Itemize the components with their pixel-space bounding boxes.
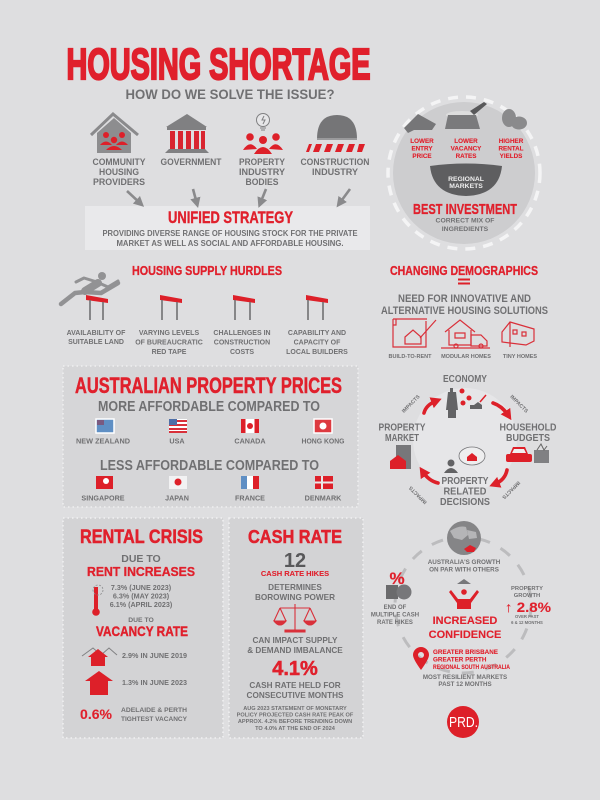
hurdle labels: AVAILABILITY OF [67,330,126,337]
heading: vacancy rate: VACANCY RATE [96,623,188,639]
icon: property market [390,445,411,469]
increased confidence: INCREASED [433,615,497,627]
icon: percent and coins: % [389,569,405,588]
stakeholder labels: INDUSTRY [312,167,359,178]
growth period [511,614,543,625]
heading: best investment: BEST INVESTMENT [413,201,517,218]
property market label: PROPERTY [378,422,426,434]
held text [247,681,344,700]
ingredient labels: LOWER [410,138,434,145]
rent figures [110,583,173,609]
best investment note: INGREDIENTS [442,226,489,233]
icon: globe [447,521,481,555]
property decisions label: DECISIONS [440,496,490,508]
icon: small house [82,648,117,666]
panel: housing supply hurdles [61,264,348,356]
growth period: OVER PAST [515,614,539,619]
icon: mixing bowl [430,164,502,196]
icon: person and thought cloud [444,447,485,473]
equals sign [458,280,470,284]
tightest text: ADELAIDE & PERTH [121,707,187,714]
icon: large house [85,671,113,695]
2019 rate: 2.9% IN JUNE 2019 [122,653,187,660]
icon: economy figures [446,388,486,418]
arrows into strategy [127,189,350,204]
icon: scales [274,604,316,632]
rent figures: 6.1% (APRIL 2023) [110,600,173,609]
panel: economic cycle [378,373,557,508]
heading: rental crisis: RENTAL CRISIS [80,527,203,548]
cash rate hikes end: END OF [384,605,407,611]
panel: australian property prices [63,366,358,507]
logo: PRD: PRD. [449,714,478,731]
hurdle labels: VARYING LEVELS [139,330,199,337]
held text: CONSECUTIVE MONTHS [247,691,344,700]
growth period: 6 & 12 MONTHS [511,620,543,625]
held text: CASH RATE HELD FOR [249,681,341,690]
ingredient labels [410,138,524,160]
economy label: ECONOMY [443,373,487,385]
tightest figure: 0.6% [80,706,113,722]
more affordable heading: MORE AFFORDABLE COMPARED TO [98,399,320,415]
ingredient labels: RENTAL [498,146,524,152]
first row country labels: USA [169,436,185,446]
icon: government [165,114,209,153]
stakeholder labels: GOVERNMENT [160,157,222,168]
housing type labels: TINY HOMES [503,354,537,360]
icon: confident person [449,579,479,609]
hurdle 4 [306,295,328,320]
resilient markets [433,649,510,671]
stakeholder labels: CONSTRUCTION [300,157,370,168]
flag: japan [169,476,187,489]
rba note: POLICY PROJECTED CASH RATE PEAK OF [237,712,354,718]
hurdle labels: OF BUREAUCRATIC [135,340,203,346]
cash rate hikes: CASH RATE HIKES [261,569,329,578]
rent figures: 7.3% (JUNE 2023) [111,583,172,592]
property decisions label [440,475,490,508]
resilient markets: GREATER BRISBANE [433,649,498,656]
impacts labels: IMPACTS [408,484,429,505]
stakeholder labels: HOUSING [99,167,139,178]
heading: cash rate: CASH RATE [248,527,342,547]
first row country labels [76,436,345,446]
2023 rate: 1.3% IN JUNE 2023 [122,680,187,687]
property growth label: PROPERTY [511,586,543,592]
panel: unified strategy [85,206,370,250]
icon: build to rent [393,319,436,347]
heading: australian property prices: AUSTRALIAN PROPERTY PRICES [75,373,342,398]
due to: DUE TO [121,553,161,565]
ingredient labels: LOWER [454,138,478,145]
impacts labels: IMPACTS [500,479,521,500]
determines text: BOROWING POWER [255,593,335,602]
icon: shopping bag [534,444,549,463]
ingredient labels: RATES [456,153,476,160]
icon: location pin [413,647,429,670]
figure 12: 12 [284,550,306,572]
icon: flour [445,102,487,129]
icon: construction helmet [306,115,365,152]
heading: unified strategy: UNIFIED STRATEGY [168,208,293,227]
icon: thermometer [92,585,103,616]
demographics text [381,293,548,317]
subtitle: HOW DO WE SOLVE THE ISSUE? [126,86,334,102]
icon: community housing [91,114,138,153]
first row country labels: CANADA [234,436,266,446]
logo: PRD [447,706,479,738]
panel: rental crisis [63,518,223,738]
panel: increased confidence [371,521,552,688]
best investment note [436,218,494,233]
flag: new zealand [96,419,114,433]
hurdle labels: SUITABLE LAND [68,339,124,346]
title: HOUSING SHORTAGE [66,40,370,89]
second row country labels: SINGAPORE [81,494,125,502]
icon: eggs [502,109,527,130]
impact text: CAN IMPACT SUPPLY [252,636,338,645]
tightest text: TIGHTEST VACANCY [121,716,188,723]
hurdle labels: LOCAL BUILDERS [286,349,348,356]
impact text: & DEMAND IMBALANCE [247,646,343,655]
increased confidence: CONFIDENCE [429,629,501,641]
icon: modular home [441,320,490,348]
stakeholder labels [92,157,370,188]
hurdle 2 [160,295,182,320]
figure 4.1%: 4.1% [272,658,318,680]
unified strategy text: PROVIDING DIVERSE RANGE OF HOUSING STOCK FOR THE PRIVATE [102,229,358,238]
housing type labels: BUILD-TO-RENT [389,354,432,360]
flag: france [241,476,259,489]
property growth label: GROWTH [514,593,540,599]
property decisions label: PROPERTY [442,475,488,487]
impacts labels: IMPACTS [401,394,422,415]
growth text: AUSTRALIA'S GROWTH [428,559,501,566]
panel: best investment [388,97,540,249]
household budgets label: BUDGETS [506,432,550,444]
rba note: AUG 2023 STATEMENT OF MONETARY [243,706,347,712]
housing type labels [389,354,537,360]
housing type labels: MODULAR HOMES [441,354,491,360]
second row country labels: DENMARK [305,494,342,502]
demographics text: ALTERNATIVE HOUSING SOLUTIONS [381,305,548,317]
panel: cash rate [229,518,363,738]
stakeholder labels: COMMUNITY [92,157,146,168]
impact text [247,636,343,655]
growth figure: ↑ 2.8% [505,599,552,615]
unified strategy text: MARKET AS WELL AS SOCIAL AND AFFORDABLE HOUSING. [116,239,344,248]
hurdle labels: CAPABILITY AND [288,330,346,337]
property market label: MARKET [385,432,419,444]
icon: hurdler [61,272,118,304]
hurdle labels: CHALLENGES IN [213,330,271,337]
icon: tiny home [502,322,534,347]
ingredient labels: PRICE [412,153,432,160]
heading: rent increases: RENT INCREASES [87,564,195,579]
hurdle labels [67,330,348,356]
second row country labels: JAPAN [165,494,189,502]
rent figures: 6.3% (MAY 2023) [113,592,170,600]
property growth label [511,586,543,599]
icon: butter [404,114,436,133]
stakeholder labels: PROPERTY [239,157,286,168]
rba note: APPROX. 4.2% BEFORE TRENDING DOWN [238,719,352,725]
best investment note: CORRECT MIX OF [436,218,494,224]
due to small: DUE TO [128,617,154,624]
property decisions label: RELATED [444,486,487,498]
icon: property industry bodies [243,114,283,154]
bowl label: REGIONAL [448,176,484,183]
hurdle labels: CONSTRUCTION [214,340,270,346]
demographics text: NEED FOR INNOVATIVE AND [398,293,531,305]
cycle arrows [423,401,508,484]
icon: car [506,447,532,462]
resilient caption: PAST 12 MONTHS [438,681,492,688]
cash rate hikes end: MULTIPLE CASH [371,612,419,618]
determines text: DETERMINES [268,583,322,592]
first row country labels: NEW ZEALAND [76,436,130,446]
rba note [237,706,354,732]
hurdle labels: CAPACITY OF [294,340,341,346]
growth text: ON PAR WITH OTHERS [429,566,499,574]
property market label [378,422,426,444]
icon: percent and coins [386,569,412,600]
flag: singapore [96,476,113,489]
second row country labels [81,494,342,502]
second row country labels: FRANCE [235,494,265,502]
hurdle 3 [233,295,255,320]
resilient caption: MOST RESILIENT MARKETS [423,674,507,681]
determines text [255,583,335,602]
rba note: TO 4.0% AT THE END OF 2024 [255,726,336,732]
growth text [428,559,501,574]
cash rate hikes end: RATE HIKES [377,620,413,626]
tightest text [121,707,188,723]
hurdle labels: RED TAPE [152,349,187,356]
resilient markets: GREATER PERTH [433,656,487,664]
resilient markets: REGIONAL SOUTH AUSTRALIA [433,664,510,671]
stakeholder labels: BODIES [246,177,278,188]
first row country labels: HONG KONG [302,436,345,446]
less affordable heading: LESS AFFORDABLE COMPARED TO [100,458,319,474]
unified strategy text [102,229,358,248]
increased confidence [429,615,501,641]
ingredient labels: ENTRY [411,146,433,152]
heading: changing demographics: CHANGING DEMOGRAPHICS [390,263,538,278]
flag: hong kong [314,419,332,433]
household budgets label: HOUSEHOLD [500,422,557,434]
bowl label: MARKETS [449,183,483,190]
resilient caption [423,674,507,688]
stakeholder labels: PROVIDERS [93,177,145,188]
cash rate hikes end [371,605,419,626]
ingredient labels: VACANCY [451,146,482,152]
flag: canada [241,419,259,433]
bowl label [448,176,484,190]
household budgets label [500,422,557,444]
hurdle 1 [86,295,108,320]
panel: changing demographics [381,263,548,360]
ingredient labels: YIELDS [500,153,522,160]
impacts labels: IMPACTS [508,394,529,415]
flag: denmark [315,476,333,489]
stakeholder labels: INDUSTRY [239,167,286,178]
flag: usa [169,419,187,433]
ingredient labels: HIGHER [499,138,524,145]
impacts labels [401,394,529,505]
hurdle labels: COSTS [230,349,254,356]
heading: hurdles: HOUSING SUPPLY HURDLES [132,264,282,278]
